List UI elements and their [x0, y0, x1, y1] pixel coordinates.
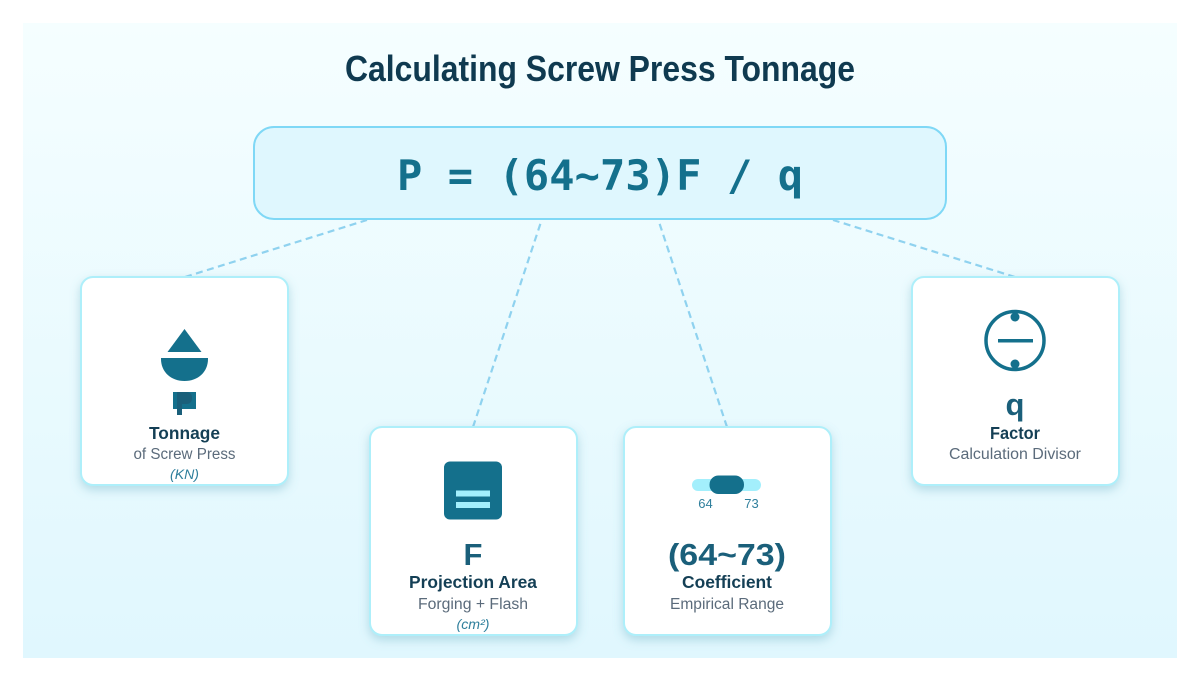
- heading: coefficient: Coefficient: [682, 572, 772, 592]
- formula text: P = (64~73)F / q: [397, 151, 803, 200]
- icon: area square: [444, 462, 502, 520]
- panel: coefficient: [624, 427, 831, 635]
- connector: formula to tonnage: [185, 220, 367, 277]
- description: forging + flash: Forging + Flash: [418, 596, 528, 613]
- symbol: 64~73: (64~73): [668, 537, 786, 572]
- panel: factor: [912, 277, 1119, 485]
- icon: press: [161, 329, 208, 415]
- description: empirical range: Empirical Range: [670, 596, 784, 613]
- icon: range slider: 73: [744, 496, 759, 511]
- title: Calculating Screw Press Tonnage: [345, 48, 855, 89]
- connector: formula to factor: [833, 220, 1015, 277]
- heading: tonnage: Tonnage: [149, 423, 220, 443]
- symbol: F: F: [464, 537, 482, 572]
- unit: cm2: (cm²): [456, 616, 490, 632]
- heading: factor: Factor: [990, 423, 1040, 443]
- connector: formula to coefficient: [659, 222, 727, 427]
- connector: formula to projection area: [473, 222, 541, 427]
- panel: projection area: [370, 427, 577, 635]
- icon: range slider: 64: [698, 496, 713, 511]
- symbol: q: q: [1006, 387, 1024, 422]
- unit: KN: (KN): [170, 466, 199, 482]
- icon: range slider: [692, 476, 761, 511]
- description: of screw press: of Screw Press: [134, 446, 236, 463]
- icon: division circle: [986, 312, 1044, 370]
- heading: projection area: Projection Area: [409, 572, 537, 592]
- description: calculation divisor: Calculation Divisor: [949, 446, 1081, 463]
- formula box: [254, 127, 946, 219]
- panel: tonnage: [81, 277, 288, 485]
